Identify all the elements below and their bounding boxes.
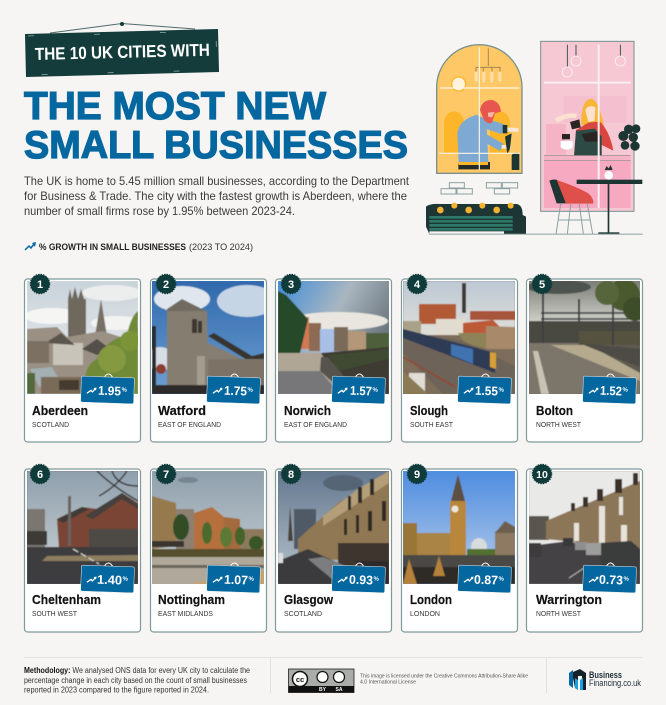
growth tag 0.73%: 0.73 [599,573,623,587]
table with small plant [577,165,642,234]
growth tag 1.40%: % [122,577,129,583]
photo: Warrington terraced street [529,471,640,584]
region: SCOTLAND [284,609,323,618]
region: NORTH WEST [536,420,581,429]
growth tag 0.73% [583,562,637,593]
main heading: SMALL BUSINESSES [24,124,408,167]
title sign: the 10 UK cities with: THE 10 UK CITIES WITH [35,40,210,64]
growth tag 1.52%: % [622,387,629,394]
growth tag 1.55%: 1.55 [475,384,498,398]
city name: Watford [158,403,206,418]
growth tag 1.52% [583,373,637,404]
card 9: London [402,464,518,632]
rank badge 4: 4 [414,279,421,291]
growth tag 1.55%: % [498,387,505,394]
growth tag 1.07%: 1.07 [224,573,248,587]
logo: Business Financing.co.uk: Financing.co.uk [589,678,641,688]
rank badge 2 [156,274,176,294]
growth tag 0.93%: % [373,577,380,583]
rank badge 6: 6 [37,469,43,481]
rank badge 10: 10 [536,469,548,481]
card 7: Nottingham [150,464,266,632]
photo: Slough railway [403,281,515,394]
card 6: Cheltenham [24,464,140,632]
methodology note: reported in 2023 compared to the figure reported in 2024. [24,686,209,694]
card 2: Watford [146,274,277,442]
growth tag 1.95%: % [121,387,128,394]
card 10: Warrington [526,464,642,632]
rank badge 10 [532,464,552,484]
rank badge 7 [156,464,176,484]
growth tag 1.07% [207,562,261,593]
rank badge 9 [408,464,426,484]
photo: Watford church [152,281,264,394]
growth tag 1.95%: 1.95 [98,384,121,398]
rank badge 9: 9 [414,469,420,481]
growth tag 1.57%: % [372,387,379,394]
rank badge 3: 3 [288,279,294,291]
city name: London [410,592,452,607]
Creative Commons licence badge [288,669,354,693]
region: SOUTH WEST [32,609,77,618]
rank badge 2: 2 [163,279,169,291]
growth tag 1.07%: % [248,577,255,583]
photo: Nottingham square [152,471,264,584]
photo: Norwich riverside [278,281,389,394]
city name: Aberdeen [32,403,88,418]
region: EAST OF ENGLAND [284,420,348,429]
rank badge 5 [532,274,552,294]
growth tag 1.75%: % [247,387,254,394]
methodology note [24,666,250,694]
city name: Norwich [284,403,331,418]
rank badge 5: 5 [539,279,545,291]
legend: percent growth in small businesses [25,242,253,252]
logo: Business Financing.co.uk: Business [589,670,622,680]
licence text: This image is licensed under the Creative Commons Attribution-Share Alike [360,674,528,680]
red chair [549,179,593,234]
growth tag 1.57% [332,373,386,404]
growth tag 0.87%: 0.87 [474,573,498,587]
growth tag 0.93%: 0.93 [349,573,373,587]
growth tag 1.40%: 1.40 [97,573,122,587]
rank badge 4 [408,274,426,294]
ground line [429,234,643,235]
photo: London Big Ben [403,471,515,584]
growth tag 0.87%: % [498,576,505,583]
logo: Business Financing.co.uk [569,669,641,690]
arched window with man [437,45,522,173]
main heading [24,85,408,167]
rank badge 1: 1 [37,279,43,291]
licence text: 4.0 International License [360,680,416,686]
licence text [360,674,528,686]
Creative Commons licence badge: SA [336,687,343,693]
rank badge 8 [282,464,300,484]
region: SOUTH EAST [410,420,453,429]
illustration: cafe shopfront with two baristas [426,41,643,235]
region: LONDON [410,609,440,618]
photo: Bolton station [529,281,640,394]
photo: Aberdeen skyline [27,281,138,394]
main heading: THE MOST NEW [24,85,326,128]
intro paragraph [24,174,410,218]
legend: percent growth in small businesses: % GROWTH IN SMALL BUSINESSES [39,242,186,252]
growth tag 1.75%: 1.75 [224,384,247,398]
region: EAST OF ENGLAND [158,420,222,429]
plant on sill [618,124,640,151]
rank badge 6 [30,464,50,484]
photo: Cheltenham street [27,471,138,584]
legend: percent growth in small businesses: (2023 TO 2024) [189,242,253,252]
region: SCOTLAND [32,420,70,429]
rank badge 7: 7 [163,469,169,481]
growth tag 0.73%: % [623,576,630,583]
growth tag 1.75% [207,373,261,404]
region: NORTH WEST [536,609,581,618]
growth tag 1.52%: 1.52 [600,384,622,398]
region: EAST MIDLANDS [158,609,213,618]
city name: Nottingham [158,592,225,607]
card 1: Aberdeen [24,274,143,442]
card 8: Glasgow [276,464,392,632]
growth tag 0.93% [332,562,386,593]
growth tag 0.87% [458,562,512,593]
pink window with woman [541,41,634,211]
hedge planter [426,203,526,234]
card 4: Slough [402,274,518,442]
growth tag 1.55% [458,373,512,404]
bricks [441,183,518,194]
photo: Glasgow terrace [278,471,389,584]
methodology note: Methodology: We analysed ONS data for every UK city to calculate the [24,666,250,675]
card 5: Bolton [526,274,647,442]
intro paragraph: The UK is home to 5.45 million small businesses, according to the Department [24,174,410,188]
Creative Commons licence badge: cc [296,675,304,684]
city name: Warrington [536,592,602,607]
intro paragraph: number of small firms rose by 1.95% between 2023-24. [24,204,295,218]
city name: Cheltenham [32,592,101,607]
growth tag 1.40% [81,562,135,593]
city name: Slough [410,403,448,418]
rank badge 1 [30,274,50,294]
methodology note: percentage change in each city based on the count of small businesses [24,676,247,685]
growth tag 1.57%: 1.57 [350,384,372,398]
card 3: Norwich [276,274,392,442]
growth tag 1.95% [81,373,135,404]
intro paragraph: for Business & Trade. The city with the fastest growth is Aberdeen, where the [24,189,407,203]
city name: Bolton [536,403,573,418]
Creative Commons licence badge: BY [319,687,327,693]
rank badge 8: 8 [288,469,294,481]
title sign: the 10 UK cities with [25,22,219,77]
city name: Glasgow [284,592,334,607]
rank badge 3 [282,274,300,294]
